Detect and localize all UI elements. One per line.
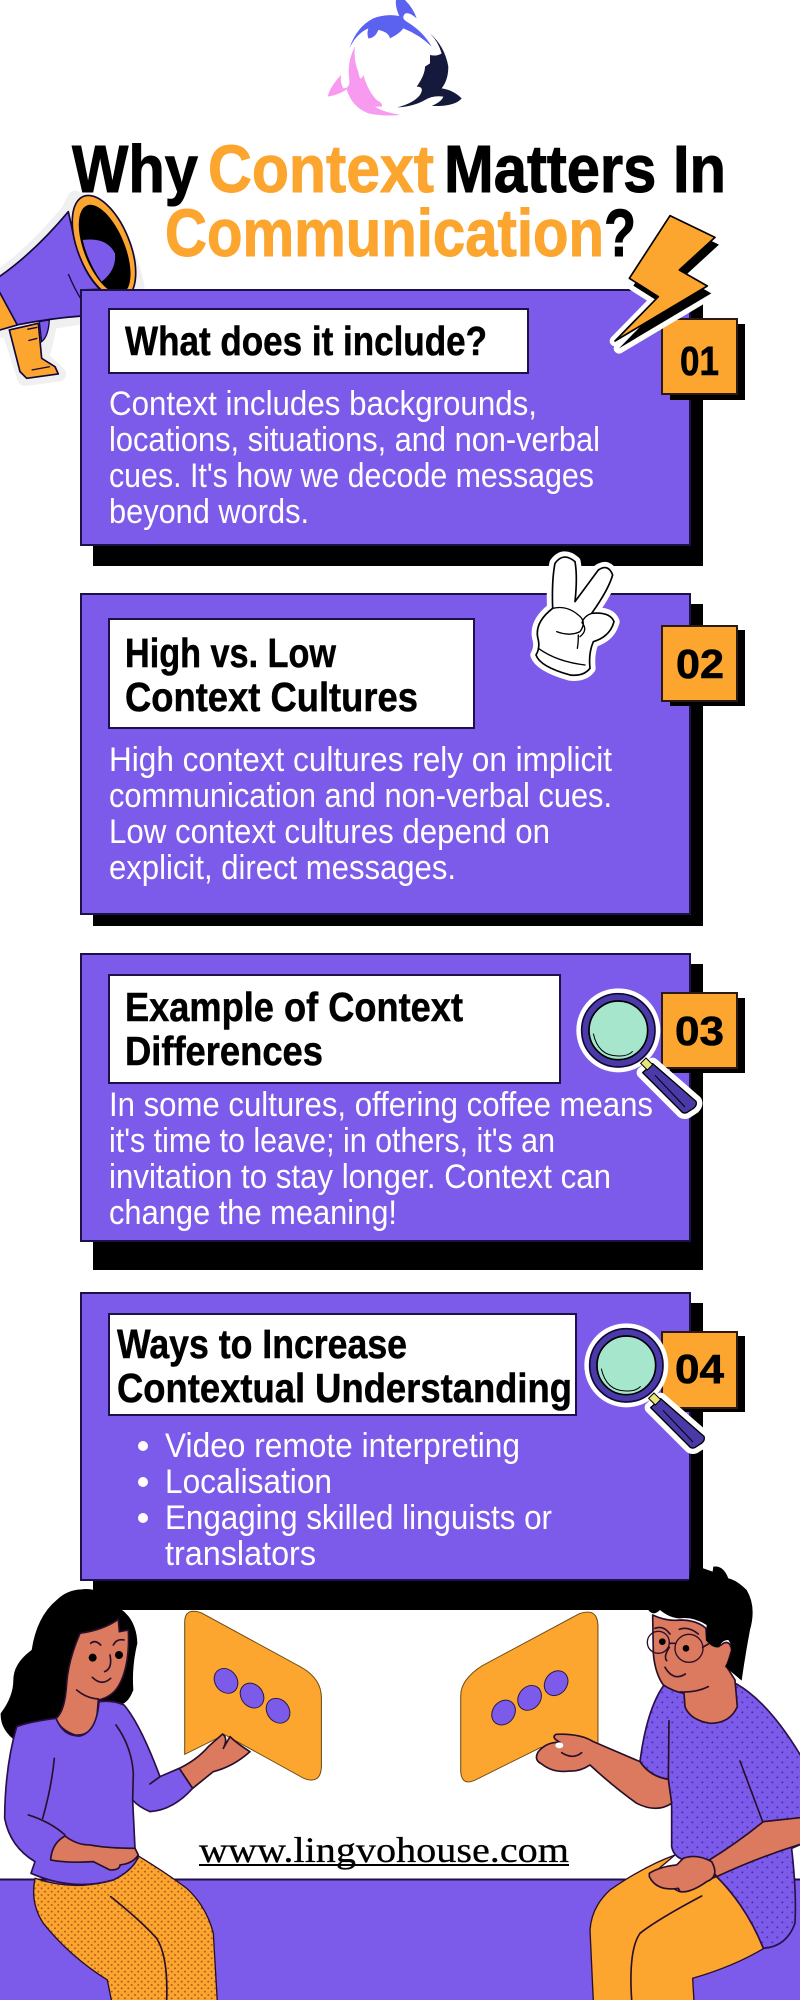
heading box 2 [109, 619, 474, 728]
icon: lightning bolt [615, 216, 719, 348]
t-shirt [640, 1684, 800, 1948]
body text 2: explicit, direct messages. [109, 849, 456, 887]
glasses and features [647, 1627, 708, 1692]
heading box 3: Differences [125, 1028, 323, 1074]
raised arm and hand [536, 1734, 672, 1808]
face and neck [653, 1615, 737, 1723]
body text 3: change the meaning! [109, 1194, 397, 1232]
number badge 02 [662, 626, 745, 706]
heading box 3: Example of Context [125, 984, 463, 1030]
heading box 3 [109, 975, 560, 1083]
panel 3: Example of Context Differences [81, 954, 703, 1270]
heading box 4: Ways to Increase [117, 1321, 407, 1367]
heading box 1 [109, 309, 528, 373]
title: Context [208, 132, 434, 207]
body text 1: Context includes backgrounds, [109, 385, 537, 423]
bullet list: Video remote interpreting [165, 1427, 520, 1465]
title: Why [72, 132, 198, 207]
body text 1: cues. It's how we decode messages [109, 457, 594, 495]
body text 2: Low context cultures depend on [109, 813, 550, 851]
body text 3: In some cultures, offering coffee means [109, 1086, 653, 1124]
title: Matters In [444, 132, 726, 207]
heading box 2: Context Cultures [125, 674, 418, 720]
body text 1 [109, 385, 600, 531]
number badge 03: 03 [675, 1008, 724, 1054]
bottom purple band [0, 1880, 800, 2000]
number badge 02: 02 [676, 641, 724, 687]
icon: magnifying glass 4 [584, 1323, 704, 1448]
body text 1: locations, situations, and non-verbal [109, 421, 600, 459]
illustration: woman sitting [1, 1589, 250, 2000]
speech bubble left [185, 1611, 321, 1780]
number badge 01: 01 [680, 338, 719, 384]
body text 2: High context cultures rely on implicit [109, 741, 613, 779]
number badge 03 [662, 993, 745, 1073]
trousers [34, 1856, 217, 2000]
heading box 1: What does it include? [125, 318, 487, 364]
heading box 4 [109, 1314, 576, 1415]
illustration: man sitting [536, 1560, 800, 2000]
body text 2: communication and non-verbal cues. [109, 777, 612, 815]
icon: peace hand [536, 557, 614, 675]
panel 4: Ways to Increase Contextual Understanding [81, 1293, 703, 1610]
website link: www.lingvohouse.com [199, 1830, 569, 1870]
heading box 2: High vs. Low [125, 630, 336, 676]
resting hand [649, 1856, 715, 1892]
number badge 04: 04 [675, 1346, 724, 1392]
heading box 4: Contextual Understanding [117, 1365, 572, 1411]
icon: magnifying glass 3 [576, 988, 696, 1113]
icon: megaphone [0, 187, 149, 378]
resting arm [707, 1817, 800, 1877]
bullet list: Localisation [165, 1463, 332, 1501]
panel 1: What does it include [81, 290, 703, 566]
logo: three figures in a circle [328, 0, 462, 116]
title [72, 132, 726, 271]
left hand [51, 1836, 138, 1870]
title: Communication [165, 196, 604, 271]
number badge 04 [662, 1332, 745, 1412]
body text 3: invitation to stay longer. Context can [109, 1158, 611, 1196]
body text 3: it's time to leave; in others, it's an [109, 1122, 555, 1160]
title: ? [604, 196, 636, 271]
bullet list [138, 1427, 552, 1573]
hair [1, 1589, 137, 1742]
speech bubble right [461, 1612, 598, 1782]
hair [648, 1560, 753, 1681]
body text 3 [109, 1086, 653, 1232]
face and neck [56, 1619, 129, 1735]
right hand [179, 1734, 250, 1788]
panel 2: High vs. Low Context Cultures [81, 594, 703, 926]
top [5, 1701, 193, 1885]
bullet list: Engaging skilled linguists or [165, 1499, 552, 1537]
body text 1: beyond words. [109, 493, 309, 531]
body text 2 [109, 741, 613, 887]
number badge 01 [662, 319, 745, 400]
trousers [590, 1855, 764, 2000]
bullet list: translators [165, 1535, 316, 1573]
